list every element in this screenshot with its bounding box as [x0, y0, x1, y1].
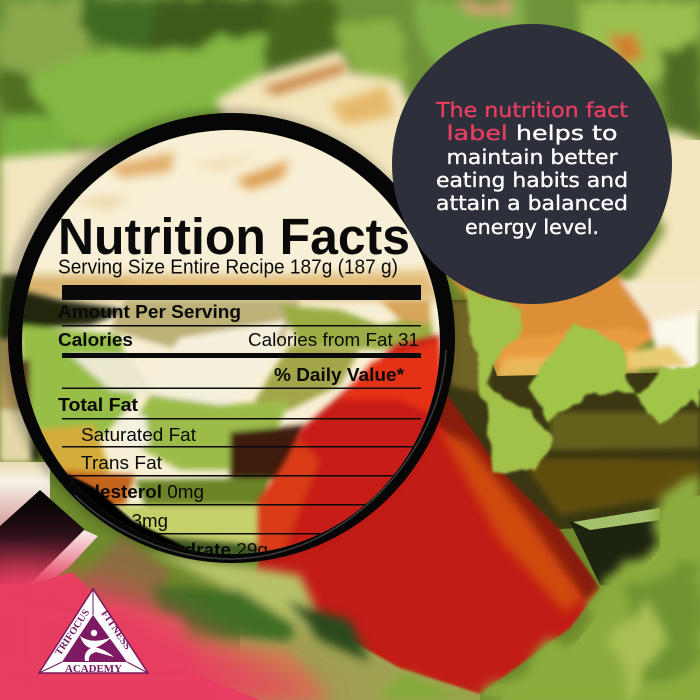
- logo figure: [80, 630, 114, 661]
- magnifier handle: [0, 490, 98, 592]
- magnifier lens view: [22, 130, 440, 554]
- logo text: TRIFOCUS: [53, 607, 92, 658]
- cholesterol: Cholesterol 0mg: [58, 481, 204, 502]
- calories from fat: Calories from Fat 31: [248, 329, 419, 350]
- label title: Nutrition Facts: [58, 208, 410, 265]
- sodium: Sodium 3mg: [58, 510, 168, 531]
- serving size: Serving Size Entire Recipe 187g (187 g): [58, 256, 398, 278]
- logo text: FITNESS: [99, 609, 133, 652]
- circle text: label helps to: [446, 121, 618, 145]
- circle text: energy level.: [465, 215, 599, 239]
- calories: Calories: [58, 329, 133, 350]
- left side mid: [0, 275, 40, 462]
- tortilla: [0, 50, 700, 320]
- pink corner gradient: [0, 565, 340, 700]
- cheese layers right: [448, 275, 700, 380]
- circle text: attain a balanced: [436, 191, 628, 215]
- info circle: [392, 24, 672, 304]
- circle text: eating habits and: [436, 168, 628, 192]
- bottom right lettuce: [500, 495, 700, 700]
- cucumber: [570, 510, 660, 590]
- magnifier ring: [8, 113, 455, 563]
- blurred lettuce top: [0, 0, 700, 180]
- logo text: [53, 607, 133, 675]
- saturated fat: Saturated Fat: [81, 424, 196, 445]
- circle text: [435, 98, 628, 239]
- dark layers right: [440, 300, 700, 530]
- circle text: maintain better: [446, 145, 618, 169]
- bottom greens: [75, 535, 370, 700]
- daily value: % Daily Value*: [274, 364, 405, 385]
- circle text: The nutrition fact: [435, 98, 628, 122]
- amount per serving: Amount Per Serving: [58, 301, 241, 322]
- trans fat: Trans Fat: [81, 452, 162, 473]
- tomato: [255, 340, 600, 694]
- total fat: Total Fat: [58, 394, 138, 415]
- nutrition facts label: [58, 208, 421, 560]
- inner lens shadow: [0, 100, 240, 340]
- lens shadow: [0, 109, 452, 561]
- logo: Trifocus Fitness Academy: [39, 589, 148, 675]
- total carbohydrate: Total Carbohydrate 29g: [58, 539, 268, 560]
- crisp lettuce: [465, 290, 700, 472]
- logo text: ACADEMY: [65, 664, 123, 675]
